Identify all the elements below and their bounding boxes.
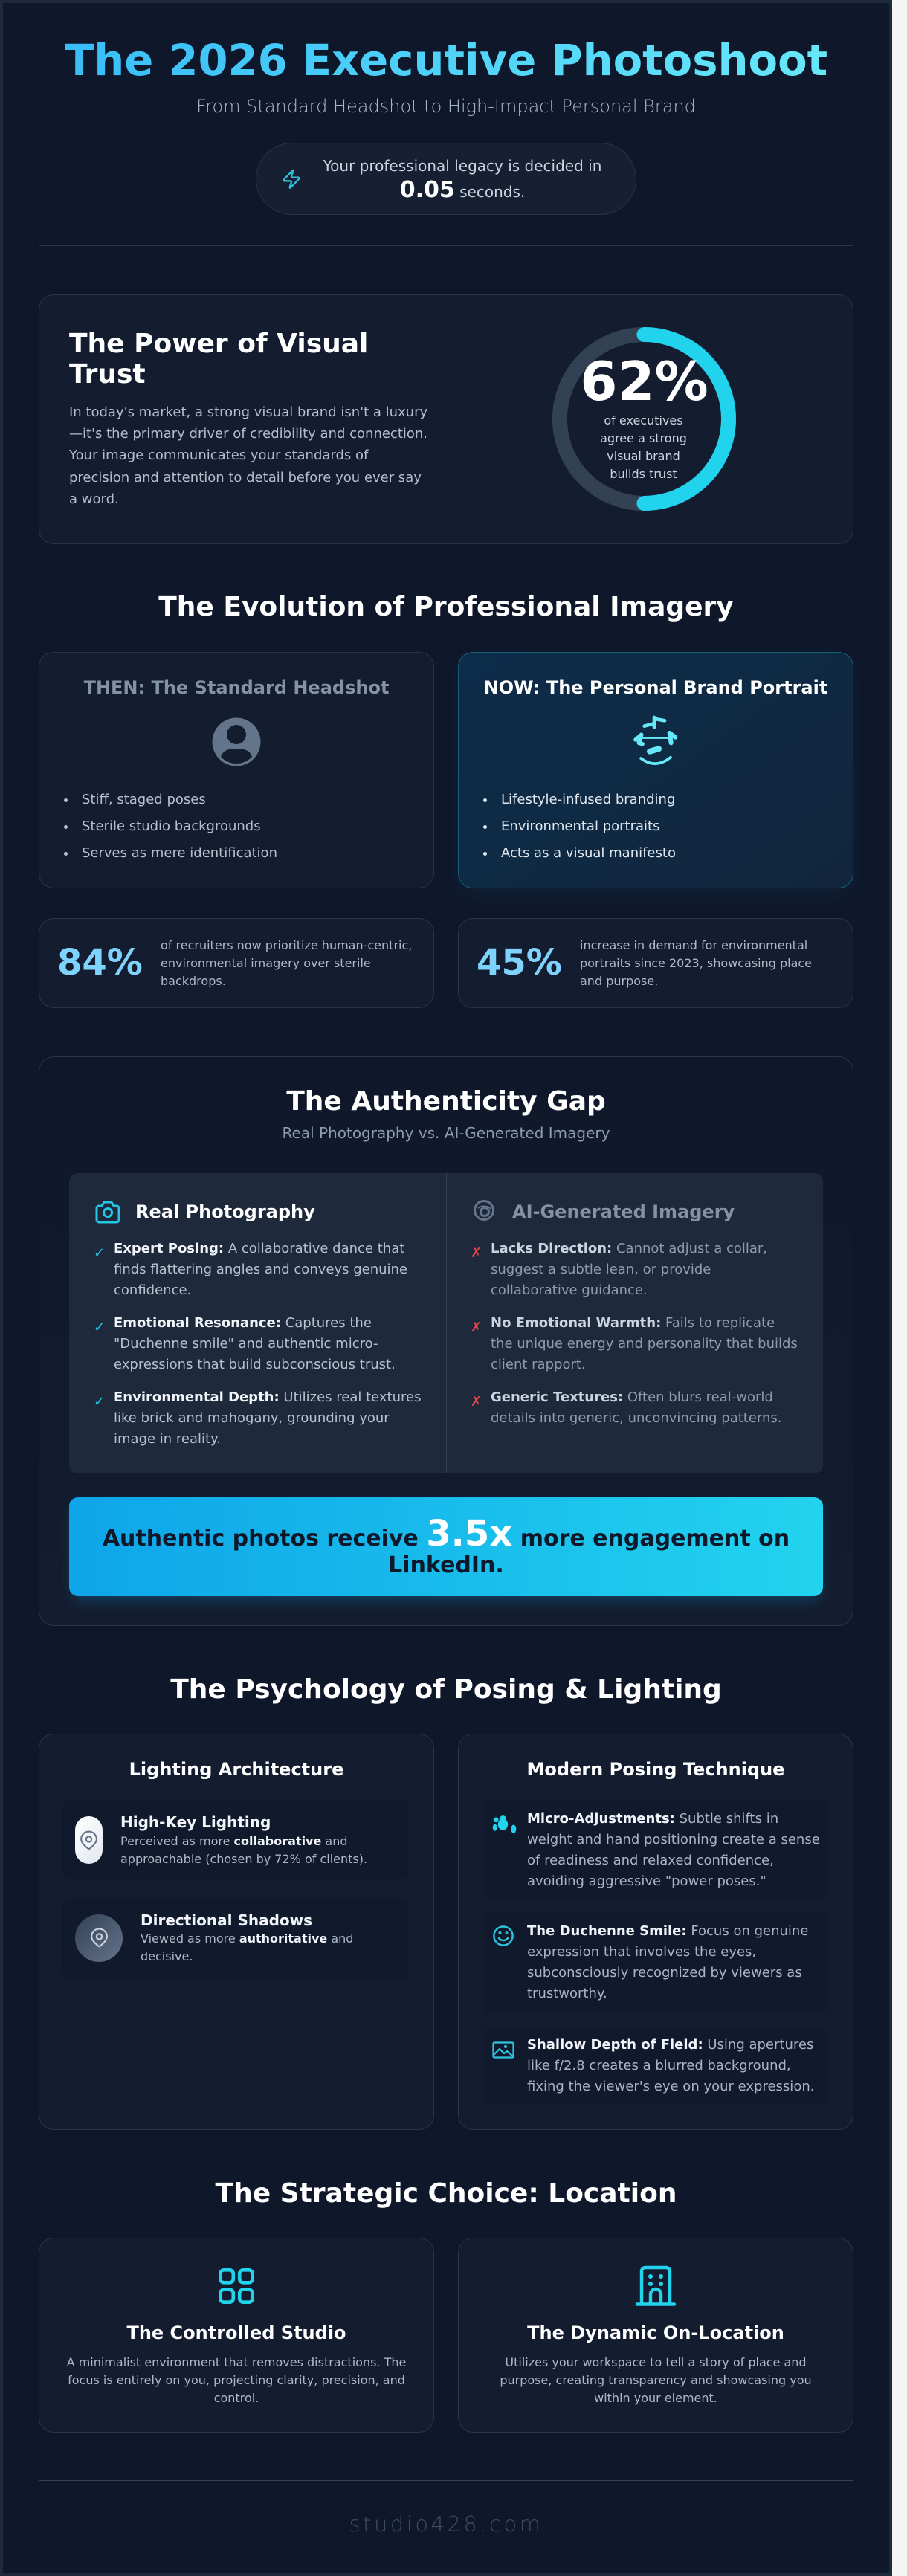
callout: 3.5x engagement	[69, 1497, 823, 1596]
list	[64, 792, 277, 861]
item 2: the unique energy and personality that builds	[491, 1336, 798, 1352]
item 3: image in reality.	[114, 1431, 221, 1447]
column title: Real Photography	[135, 1201, 315, 1222]
item text: approachable (chosen by 72% of clients).	[120, 1851, 367, 1866]
item text: decisive.	[141, 1949, 193, 1963]
callout text	[323, 157, 601, 203]
panel: power of visual trust	[39, 294, 853, 544]
icon: blobs	[492, 1815, 516, 1833]
comparison table	[69, 1173, 823, 1473]
item 3	[114, 1389, 422, 1447]
item text	[141, 1931, 353, 1963]
icon: ai ring	[474, 1200, 494, 1221]
column: real photography	[94, 1201, 422, 1447]
item: duchenne smile	[483, 1913, 828, 2013]
item text: trustworthy.	[527, 1986, 607, 2001]
body text: —it's the primary driver of credibility and connection.	[69, 426, 427, 442]
item text: The Duchenne Smile: Focus on genuine	[527, 1923, 808, 1939]
stat text: of recruiters now prioritize human-centric,	[161, 938, 412, 952]
panel title: THEN: The Standard Headshot	[84, 677, 389, 698]
item text	[527, 2037, 814, 2094]
stat card: 84%	[39, 918, 434, 1008]
item text: fixing the viewer's eye on your expression.	[527, 2079, 814, 2094]
list: Stiff, staged poses	[82, 792, 206, 807]
body text: In today's market, a strong visual brand isn't a luxury	[69, 404, 427, 420]
card text: control.	[214, 2391, 259, 2405]
icon: abstract portrait	[633, 715, 678, 766]
icon: grid	[219, 2268, 254, 2304]
card title: The Dynamic On-Location	[527, 2322, 784, 2343]
item title: High-Key Lighting	[120, 1813, 271, 1831]
item 1: Lacks Direction: Cannot adjust a collar,	[491, 1241, 767, 1256]
stat text: portraits since 2023, showcasing place	[580, 956, 812, 970]
item 2: client rapport.	[491, 1357, 586, 1372]
list: Sterile studio backgrounds	[82, 819, 261, 834]
heading	[69, 329, 368, 390]
callout text: Your professional legacy is decided in	[323, 157, 601, 175]
callout text: LinkedIn.	[388, 1552, 504, 1578]
donut chart: 62%	[552, 327, 736, 511]
stat caption: agree a strong	[600, 431, 687, 445]
stat value: 45%	[477, 942, 562, 984]
item text: weight and hand positioning create a sense	[527, 1832, 820, 1847]
item 1: finds flattering angles and conveys genuine	[114, 1262, 407, 1277]
stat text: backdrops.	[161, 974, 226, 988]
heading: strategic choice: The Strategic Choice: Location	[216, 2178, 677, 2209]
card text: A minimalist environment that removes distractions. The	[67, 2355, 406, 2369]
panel title: NOW: The Personal Brand Portrait	[484, 677, 827, 698]
stat text: environmental imagery over sterile	[161, 956, 371, 970]
footer: website: studio428.com	[349, 2511, 543, 2537]
check 3: ✓	[94, 1394, 105, 1410]
callout text: 0.05 seconds.	[400, 177, 525, 203]
callout text	[103, 1513, 790, 1578]
card text	[500, 2355, 812, 2405]
item text	[120, 1834, 367, 1866]
title: The 2026 Executive Photoshoot	[65, 36, 827, 85]
item text: Viewed as more authoritative and	[141, 1931, 353, 1946]
item text	[527, 1923, 808, 2001]
item 3	[491, 1389, 782, 1426]
panel title: Modern Posing Technique	[527, 1759, 784, 1780]
stat text: and purpose.	[580, 974, 658, 988]
item: high-key lighting	[62, 1799, 409, 1879]
icon: image	[492, 2041, 514, 2059]
card text: focus is entirely on you, projecting clarity, precision, and	[68, 2373, 405, 2387]
item text: of readiness and relaxed confidence,	[527, 1853, 774, 1868]
check 1: ✓	[94, 1245, 105, 1261]
item 1	[114, 1241, 407, 1298]
column title: AI-Generated Imagery	[512, 1201, 735, 1222]
item 3: Generic Textures: Often blurs real-world	[491, 1389, 773, 1405]
icon: user circle	[213, 718, 260, 766]
item 2	[491, 1315, 798, 1372]
panel: authenticity gap	[39, 1056, 853, 1626]
heading: psychology: The Psychology of Posing & Lighting	[170, 1674, 722, 1705]
item 2: Emotional Resonance: Captures the	[114, 1315, 372, 1331]
list	[483, 792, 676, 861]
body text: Your image communicates your standards of	[69, 448, 368, 463]
item 3: details into generic, unconvincing patterns.	[491, 1410, 782, 1426]
column: ai imagery	[471, 1200, 798, 1426]
check 2: ✓	[94, 1320, 105, 1335]
panel: then	[39, 652, 434, 888]
cross 2: ✗	[471, 1320, 482, 1335]
panel: now	[458, 652, 853, 888]
item 2: "Duchenne smile" and authentic micro-	[114, 1336, 378, 1352]
list: Acts as a visual manifesto	[501, 845, 676, 861]
card title: The Controlled Studio	[126, 2322, 346, 2343]
panel: controlled studio	[39, 2238, 434, 2433]
item text: Micro-Adjustments: Subtle shifts in	[527, 1811, 778, 1827]
heading: evolution: The Evolution of Professional Imagery	[158, 592, 734, 622]
body text: precision and attention to detail before you ever say	[69, 470, 422, 485]
heading: Trust	[69, 359, 146, 390]
stat text: increase in demand for environmental	[580, 938, 807, 952]
callout text: Authentic photos receive 3.5x more engagement on	[103, 1513, 790, 1555]
item text	[527, 1811, 820, 1889]
panel title: Lighting Architecture	[129, 1759, 343, 1780]
body text: a word.	[69, 491, 119, 507]
item 2: expressions that build subconscious trust.	[114, 1357, 396, 1372]
subtitle: From Standard Headshot to High-Impact Personal Brand	[196, 96, 696, 117]
item text: like f/2.8 creates a blurred background,	[527, 2058, 791, 2073]
icon: lightning bolt	[283, 170, 300, 189]
icon: building	[635, 2266, 677, 2306]
item: micro-adjustments	[483, 1801, 828, 1900]
stat card: 45%	[458, 918, 853, 1008]
stat caption: of executives	[604, 413, 683, 427]
list: Serves as mere identification	[82, 845, 277, 861]
card text: purpose, creating transparency and showcasing you	[500, 2373, 812, 2387]
item 2: No Emotional Warmth: Fails to replicate	[491, 1315, 775, 1331]
heading: The Power of Visual	[69, 329, 368, 359]
stat caption	[600, 413, 687, 481]
item: directional shadows	[62, 1898, 409, 1978]
body text	[69, 404, 427, 507]
item text: expression that involves the eyes,	[527, 1944, 756, 1960]
item 3: like brick and mahogany, grounding your	[114, 1410, 390, 1426]
card text	[67, 2355, 406, 2405]
cross 1: ✗	[471, 1245, 482, 1261]
item 1: Expert Posing: A collaborative dance that	[114, 1241, 404, 1256]
item 3: Environmental Depth: Utilizes real textures	[114, 1389, 422, 1405]
icon: smile	[493, 1925, 514, 1946]
stat caption: visual brand	[607, 449, 680, 463]
item 1: suggest a subtle lean, or provide	[491, 1262, 711, 1277]
icon: light pill	[75, 1816, 103, 1864]
item 2	[114, 1315, 396, 1372]
stat caption: builds trust	[610, 467, 677, 481]
item text: subconsciously recognized by viewers as	[527, 1965, 802, 1981]
item text: Perceived as more collaborative and	[120, 1834, 348, 1848]
subheading: Real Photography vs. AI-Generated Imagery	[283, 1124, 610, 1142]
card text: Utilizes your workspace to tell a story of place and	[505, 2355, 807, 2369]
item: shallow depth of field	[483, 2027, 828, 2105]
stat text	[580, 938, 812, 988]
item 1	[491, 1241, 767, 1298]
panel: on-location	[458, 2238, 853, 2433]
card text: within your element.	[594, 2391, 717, 2405]
cross 3: ✗	[471, 1394, 482, 1410]
stat value: 62%	[580, 350, 709, 413]
list: Environmental portraits	[501, 819, 659, 834]
list: Lifestyle-infused branding	[501, 792, 675, 807]
callout: 0.05 seconds pill	[256, 143, 636, 215]
stat value: 84%	[57, 942, 143, 984]
panel: lighting architecture	[39, 1734, 434, 2130]
item text: Shallow Depth of Field: Using apertures	[527, 2037, 813, 2053]
item 1: confidence.	[114, 1282, 191, 1298]
icon: camera	[95, 1201, 120, 1224]
item text: avoiding aggressive "power poses."	[527, 1873, 766, 1889]
panel: modern posing	[458, 1734, 853, 2130]
icon: shadow circle	[75, 1914, 123, 1962]
heading: The Authenticity Gap	[286, 1086, 606, 1117]
item 1: collaborative guidance.	[491, 1282, 648, 1298]
item title: Directional Shadows	[141, 1911, 312, 1929]
stat text	[161, 938, 412, 988]
